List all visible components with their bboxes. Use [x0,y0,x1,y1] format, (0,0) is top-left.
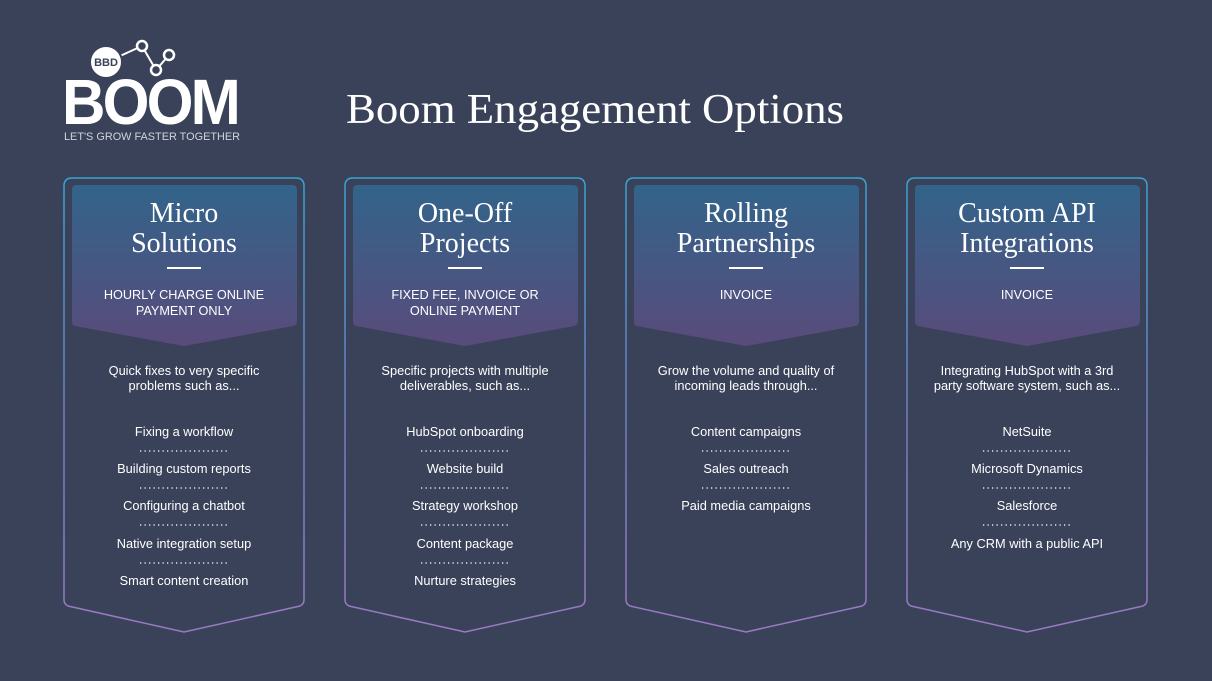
panel: Rolling Partnerships: incoming leads through... [675,378,817,393]
panel: Custom API Integrations: Integrating HubSpot with a 3rd [941,363,1113,378]
panel: One-Off Projects: Specific projects with multiple [381,363,549,378]
panel: One-Off Projects [345,178,585,632]
panel: Micro Solutions: Micro [150,198,218,229]
panel: One-Off Projects: Content package [417,536,513,551]
panel: One-Off Projects: Nurture strategies [414,573,516,588]
panel: Rolling Partnerships: Rolling [704,198,788,229]
panel: Rolling Partnerships: Paid media campaigns [681,498,811,513]
panel: Micro Solutions: PAYMENT ONLY [136,304,233,318]
panel: Rolling Partnerships: INVOICE [720,288,772,302]
panel: Micro Solutions: Fixing a workflow [135,424,234,439]
panel: Custom API Integrations: Salesforce [997,498,1057,513]
panel: Micro Solutions: problems such as... [129,378,239,393]
panel: Custom API Integrations: Integrations [960,228,1094,259]
panel: One-Off Projects: deliverables, such as... [400,378,530,393]
logo: LET'S GROW FASTER TOGETHER [64,131,240,143]
panel: One-Off Projects: ONLINE PAYMENT [410,304,520,318]
panel: Micro Solutions: Building custom reports [117,461,251,476]
panel: Custom API Integrations: Any CRM with a public API [951,536,1103,551]
panel: Rolling Partnerships: Content campaigns [691,424,801,439]
panel: Custom API Integrations: Microsoft Dynamics [971,461,1083,476]
panel: Custom API Integrations: NetSuite [1002,424,1052,439]
logo: BOOM [62,66,238,138]
panel: Custom API Integrations: party software system, such as... [934,378,1120,393]
panel: Custom API Integrations: INVOICE [1001,288,1053,302]
panel: Micro Solutions: Quick fixes to very specific [109,363,260,378]
panel: Micro Solutions: Smart content creation [120,573,248,588]
panel: Rolling Partnerships: Sales outreach [703,461,789,476]
panel: Custom API Integrations: Custom API [958,198,1096,229]
panel: Rolling Partnerships [626,178,866,632]
panel: One-Off Projects: HubSpot onboarding [406,424,524,439]
panel: One-Off Projects: Strategy workshop [412,498,518,513]
panel: One-Off Projects: Projects [420,228,510,259]
panel: Micro Solutions [64,178,304,632]
panel: Rolling Partnerships: Grow the volume and quality of [658,363,835,378]
panel: Rolling Partnerships: Partnerships [677,228,815,259]
title: Boom Engagement Options [346,87,844,133]
panel: Micro Solutions: HOURLY CHARGE ONLINE [104,288,264,302]
panel: Micro Solutions: Native integration setup [117,536,251,551]
panel: Micro Solutions: Configuring a chatbot [123,498,245,513]
panel: One-Off Projects: One-Off [418,198,513,229]
logo [62,41,240,143]
logo: BBD [94,57,118,69]
panel: Micro Solutions: Solutions [131,228,237,259]
panel: One-Off Projects: Website build [427,461,503,476]
panel: One-Off Projects: FIXED FEE, INVOICE OR [391,288,539,302]
panel: Custom API Integrations [907,178,1147,632]
